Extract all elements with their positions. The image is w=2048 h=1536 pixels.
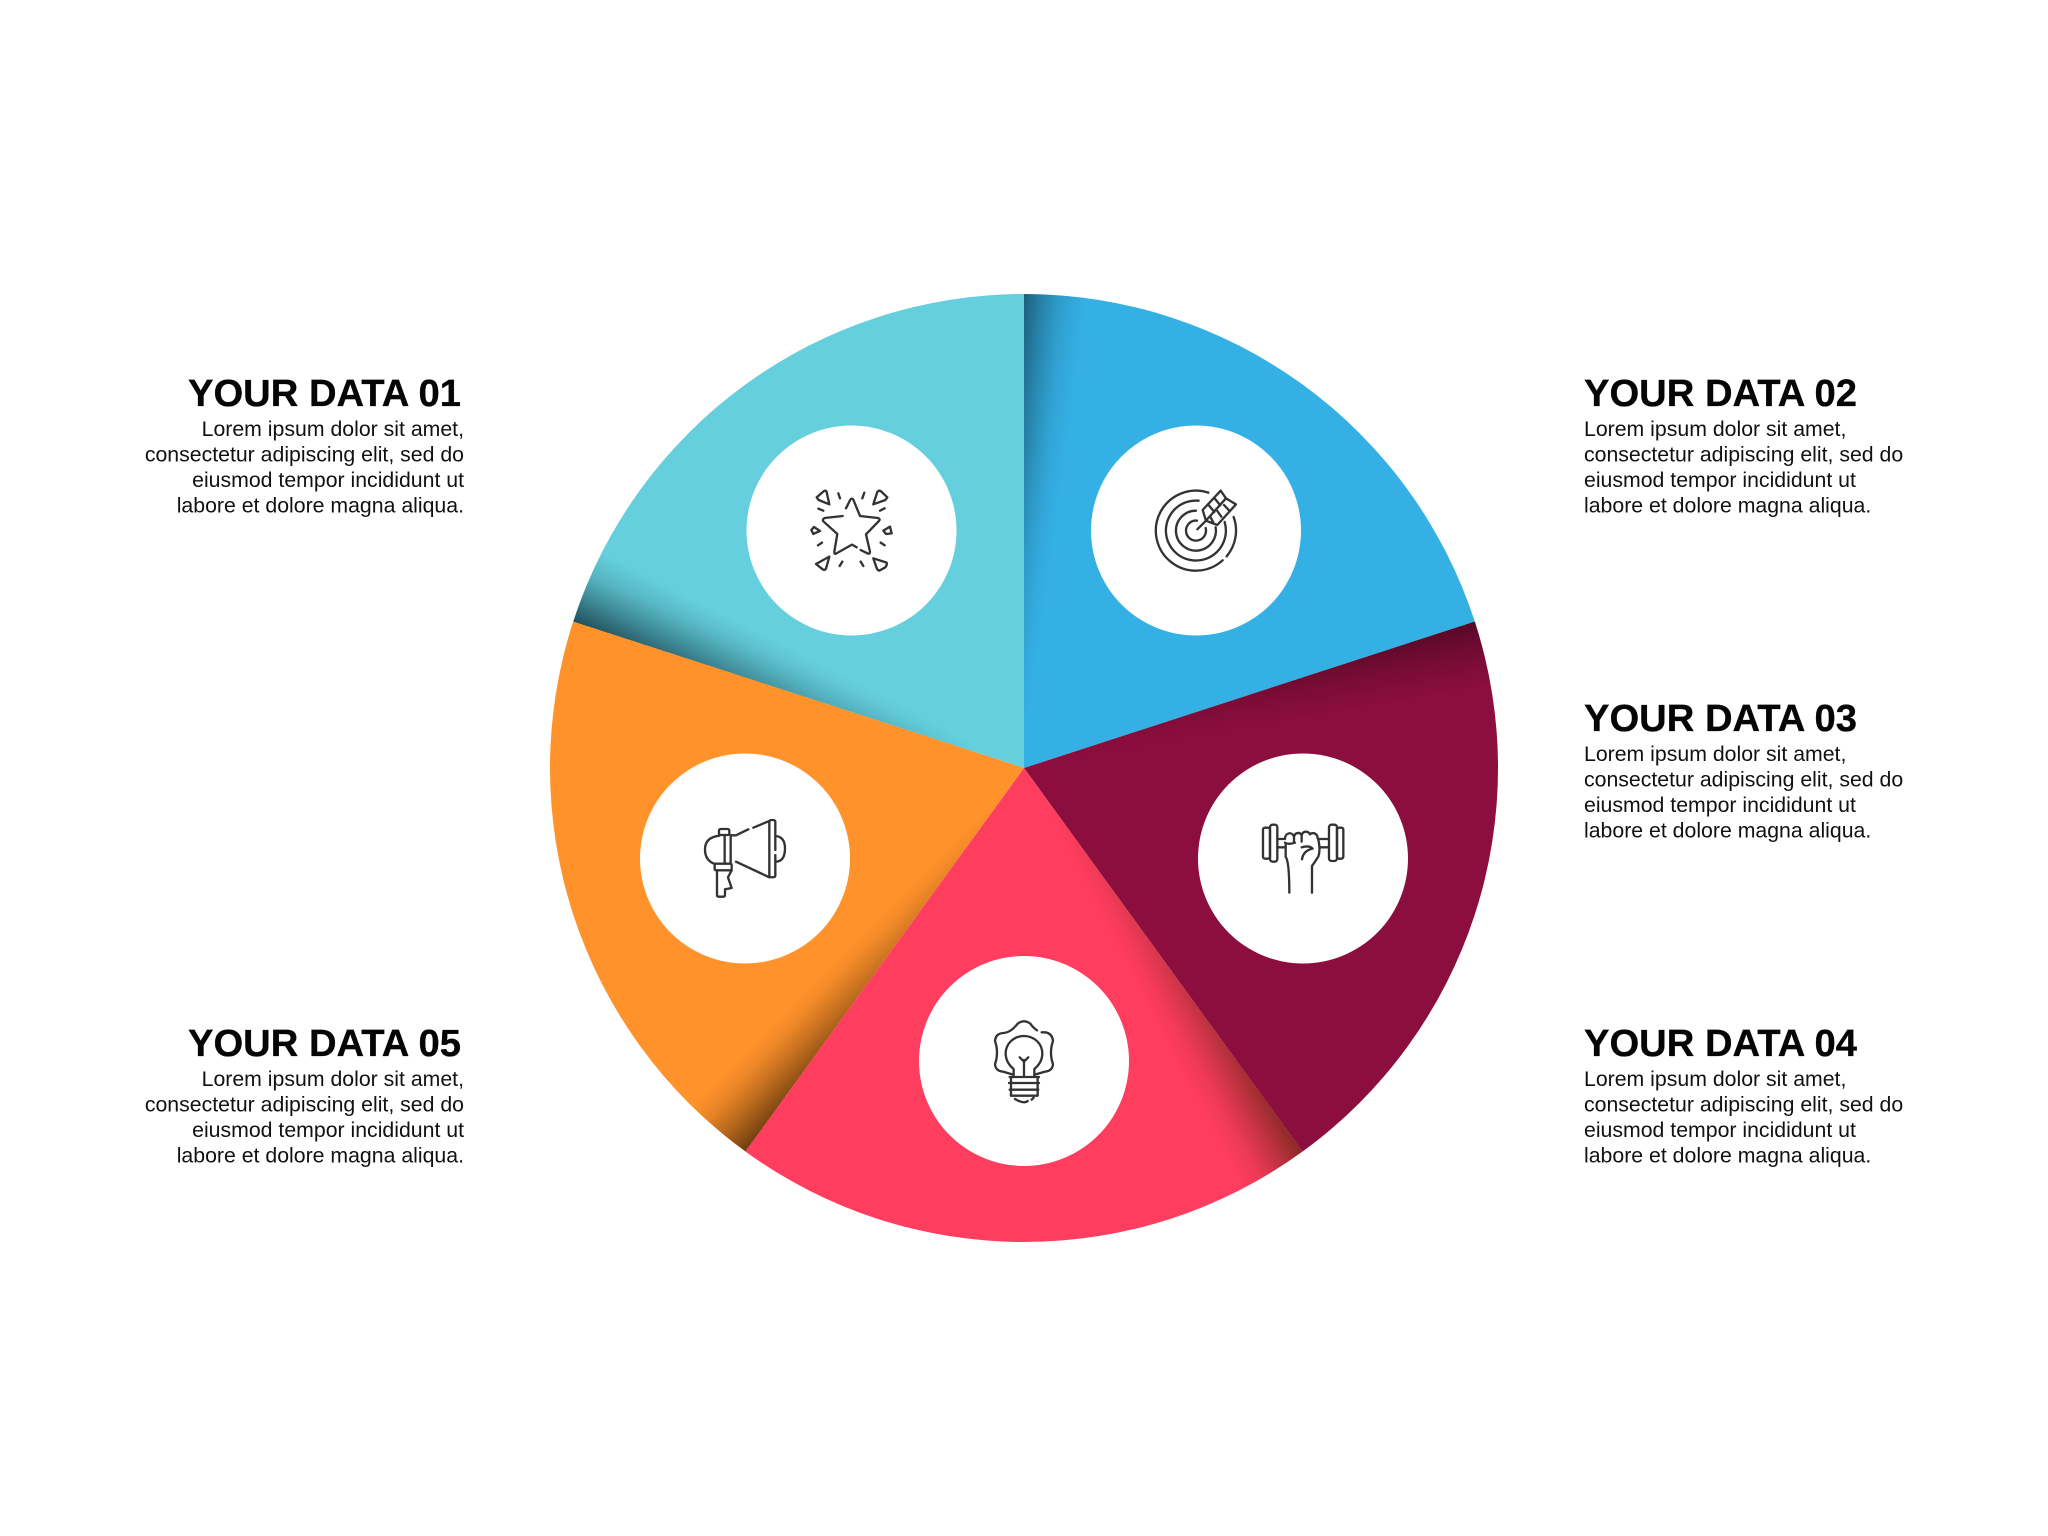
pie chart [550, 294, 1498, 1242]
body 01: Lorem ipsum dolor sit amet, [202, 417, 464, 441]
body 03: labore et dolore magna aliqua. [1584, 818, 1871, 842]
badge: target icon [1091, 426, 1301, 636]
heading 01: YOUR DATA 01 [188, 372, 461, 415]
text block: data 02 [1584, 372, 1903, 518]
body 01: eiusmod tempor incididunt ut [192, 468, 464, 492]
body 04: Lorem ipsum dolor sit amet, [1584, 1067, 1846, 1091]
slice: blue 02 [1024, 294, 1475, 768]
text block: data 05 [145, 1022, 464, 1168]
text block: data 04 [1584, 1022, 1903, 1168]
heading 04: YOUR DATA 04 [1584, 1022, 1858, 1065]
body 05: labore et dolore magna aliqua. [177, 1144, 464, 1168]
body 05: Lorem ipsum dolor sit amet, [202, 1067, 464, 1091]
body 02: labore et dolore magna aliqua. [1584, 494, 1871, 518]
body 02: eiusmod tempor incididunt ut [1584, 468, 1856, 492]
icon: megaphone [705, 820, 785, 897]
body 03: Lorem ipsum dolor sit amet, [1584, 742, 1846, 766]
body 03: eiusmod tempor incididunt ut [1584, 793, 1856, 817]
body 05: eiusmod tempor incididunt ut [192, 1118, 464, 1142]
body 02: Lorem ipsum dolor sit amet, [1584, 417, 1846, 441]
body 02 [1584, 417, 1903, 518]
text block: data 03 [1584, 697, 1903, 842]
badge: light bulb icon [919, 956, 1129, 1166]
shadow: orange slice edge [697, 833, 976, 1152]
heading 03: YOUR DATA 03 [1584, 697, 1857, 740]
body 01: consectetur adipiscing elit, sed do [145, 442, 464, 466]
body 04: labore et dolore magna aliqua. [1584, 1144, 1871, 1168]
body 01 [145, 417, 464, 518]
shadow: maroon slice edge [1142, 622, 1488, 730]
icon: bulb in gear [995, 1021, 1053, 1102]
badge: dumbbell icon [1198, 754, 1408, 964]
shadow: blue slice edge [1024, 294, 1078, 678]
body 03 [1584, 742, 1903, 842]
heading 05: YOUR DATA 05 [188, 1022, 461, 1065]
slice: pink 04 [745, 768, 1303, 1242]
body 04 [1584, 1067, 1903, 1168]
heading 02: YOUR DATA 02 [1584, 372, 1857, 415]
body 01: labore et dolore magna aliqua. [177, 494, 464, 518]
badge: star icon [746, 426, 956, 636]
icon: fist with dumbbell [1263, 825, 1343, 893]
body 05 [145, 1067, 464, 1168]
shadow: teal slice edge [573, 559, 948, 743]
slice: teal 01 [573, 294, 1024, 768]
body 05: consectetur adipiscing elit, sed do [145, 1092, 464, 1116]
slice: orange 05 [550, 622, 1024, 1152]
icon: target with arrow [1156, 491, 1236, 571]
icon: star [811, 491, 892, 571]
body 02: consectetur adipiscing elit, sed do [1584, 442, 1903, 466]
slice: maroon 03 [1024, 622, 1498, 1152]
body 04: consectetur adipiscing elit, sed do [1584, 1092, 1903, 1116]
badge: megaphone icon [640, 754, 850, 964]
body 04: eiusmod tempor incididunt ut [1584, 1118, 1856, 1142]
shadow: pink slice edge [1074, 838, 1302, 1184]
text block: data 01 [145, 372, 464, 518]
body 03: consectetur adipiscing elit, sed do [1584, 768, 1903, 792]
